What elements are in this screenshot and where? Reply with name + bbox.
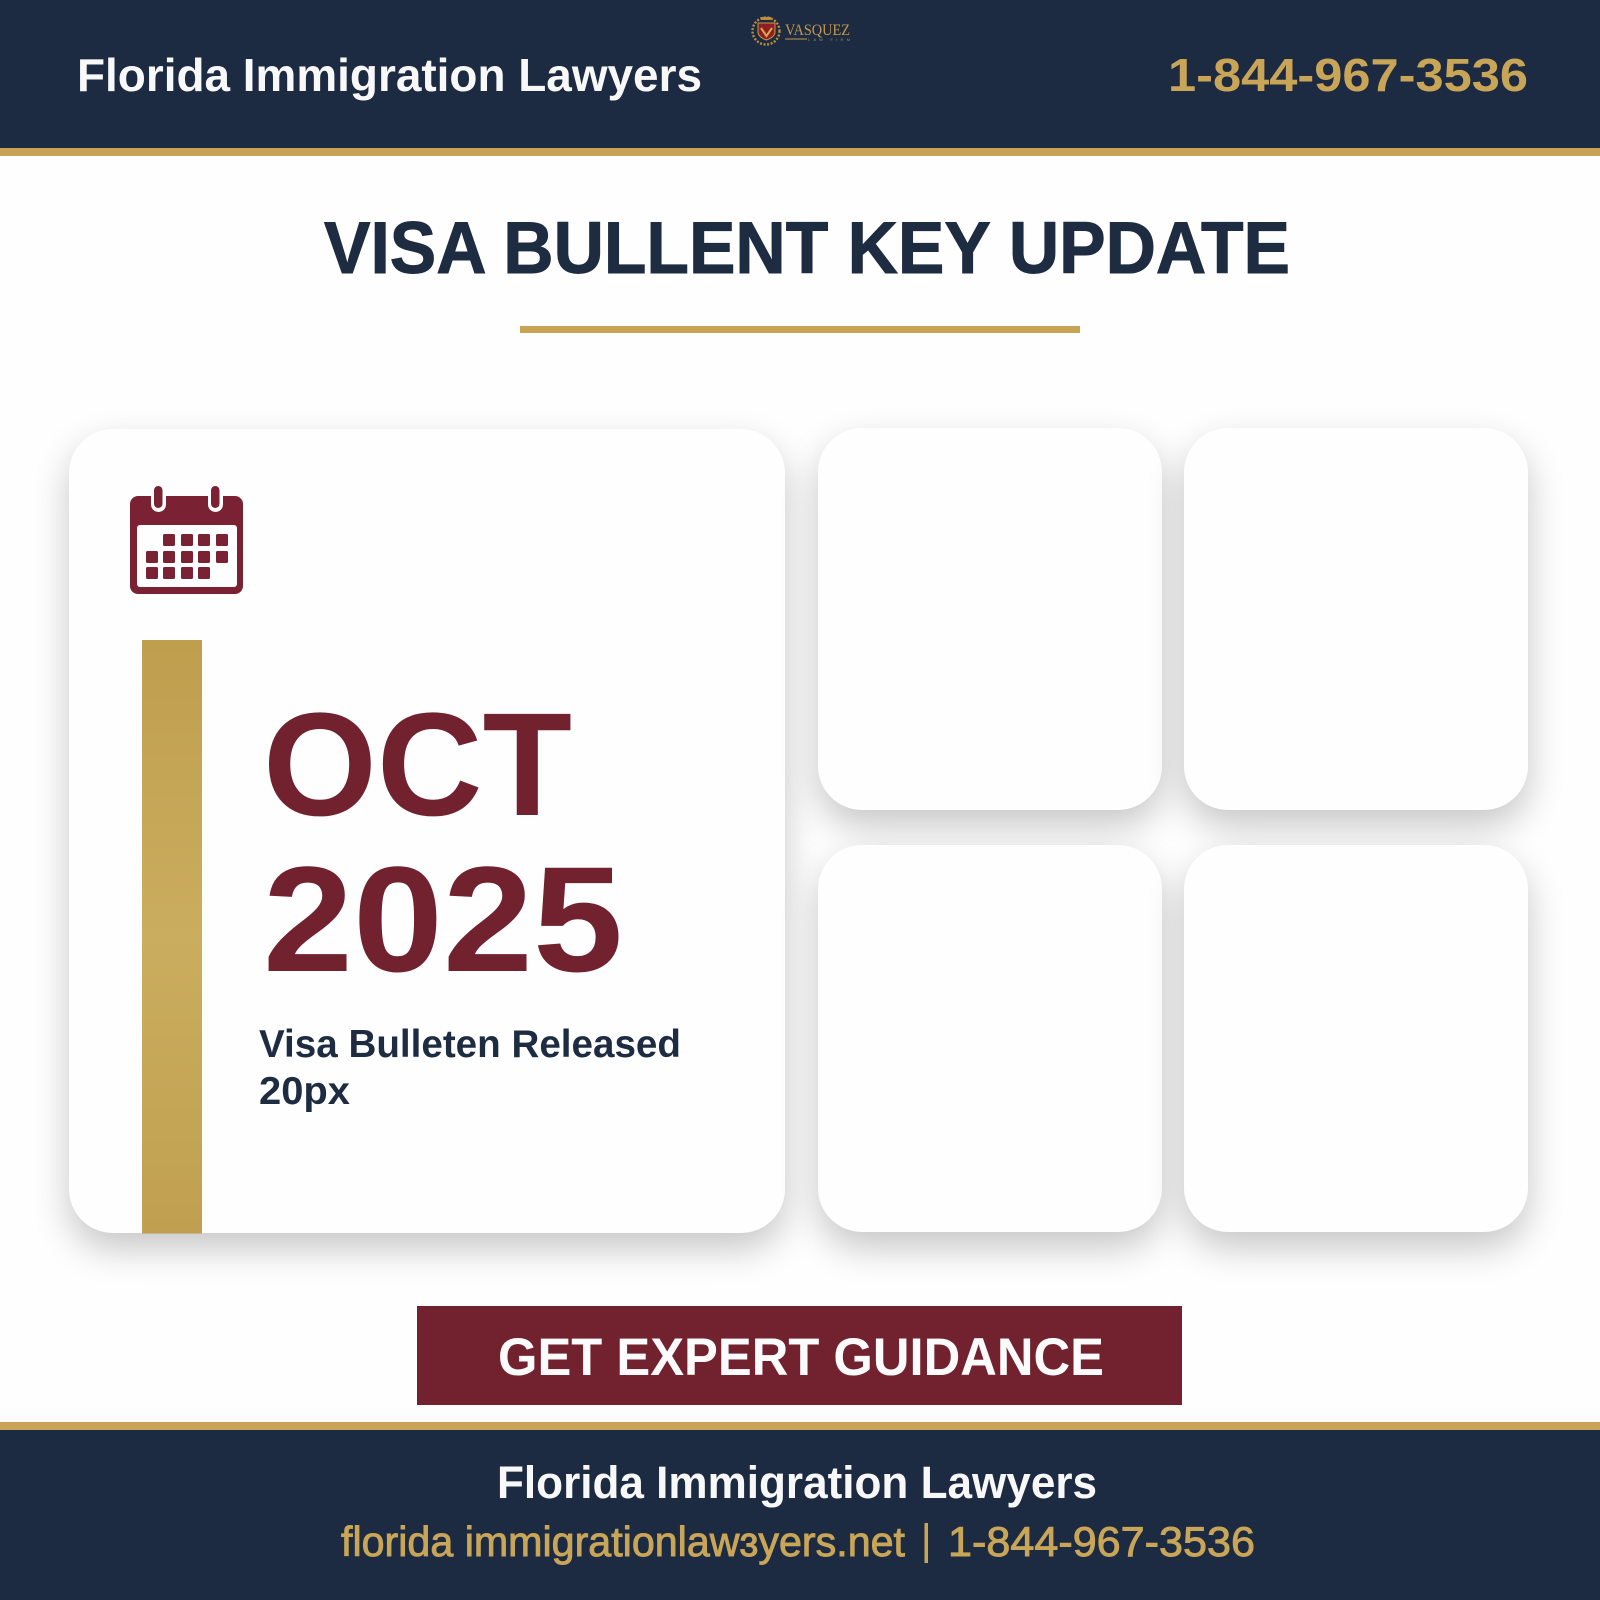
footer gold rule [0,1422,1600,1430]
button label: GET EXPERT GUIDANCE [498,1328,1104,1387]
gold accent bar [142,640,202,1234]
header gold rule [0,148,1600,156]
panel: empty card bottom left [818,845,1162,1232]
footer band [0,1422,1600,1600]
description line one: Visa Bulleten Released [259,1023,681,1066]
panel: empty card bottom right [1184,845,1528,1232]
panel: empty card top right [1184,428,1528,810]
call to action button [417,1306,1182,1405]
title gold underline [520,326,1080,333]
icon: calendar [130,482,243,594]
header firm name: Florida Immigration Lawyers [77,49,702,101]
header phone number: 1-844-967-3536 [1168,49,1528,101]
logo: Vasquez law firm: LAW FIRM [808,37,850,42]
month text: OCT [263,683,572,847]
title block [324,208,1290,333]
logo: Vasquez law firm [752,17,850,44]
header band [0,0,1600,156]
footer firm name: Florida Immigration Lawyers [497,1457,1097,1508]
footer phone number: 1-844-967-3536 [948,1518,1255,1565]
year text: 2025 [263,835,623,1003]
footer website: florida immigrationlawɜyers.net [341,1518,905,1565]
main title: VISA BULLENT KEY UPDATE [324,208,1290,289]
logo: Vasquez law firm: VASQUEZ [785,22,850,39]
description line two: 20px [259,1070,350,1113]
panel: main date card [69,429,785,1233]
panel: empty card top left [818,428,1162,810]
footer separator [924,1523,928,1563]
